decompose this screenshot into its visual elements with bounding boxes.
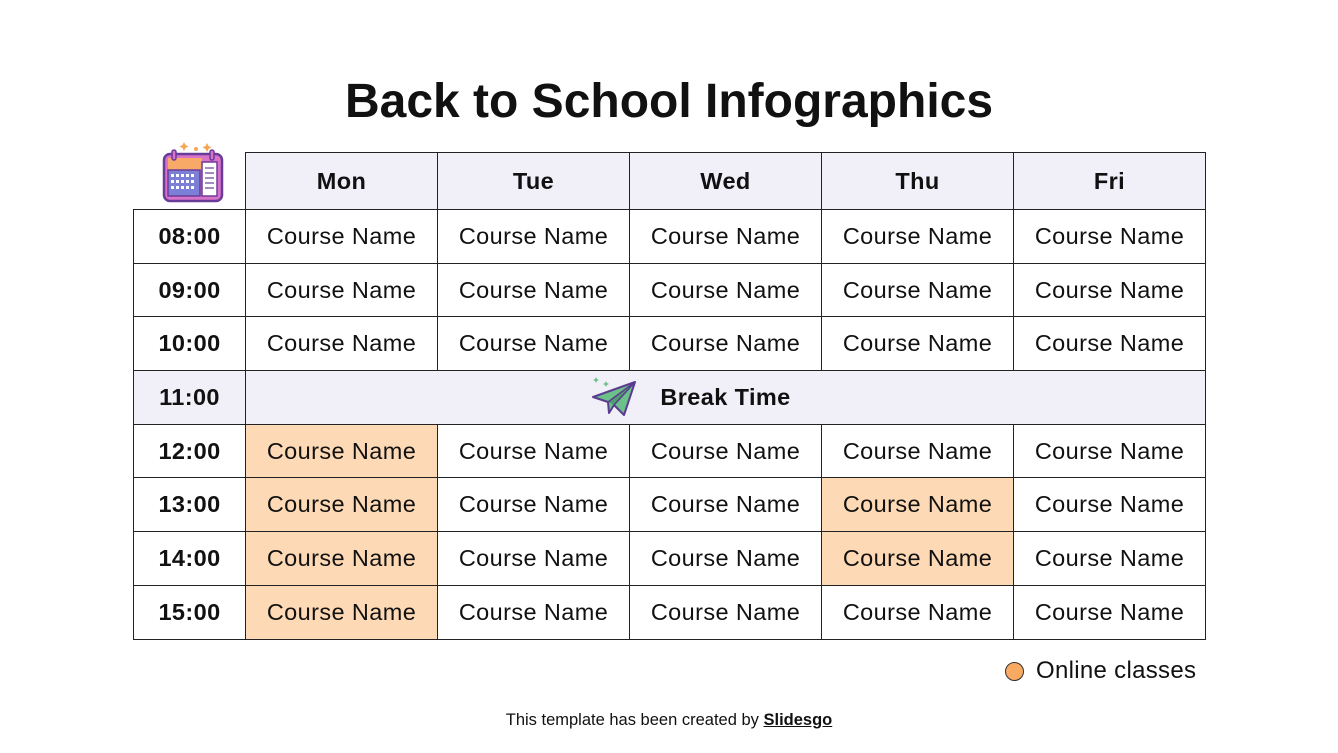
icon: calendar	[162, 142, 224, 202]
timetable: Course Name	[267, 277, 416, 303]
timetable: Course Name	[1035, 438, 1184, 464]
timetable: Course Name	[651, 223, 800, 249]
icon: paper plane	[592, 377, 636, 416]
timetable: Course Name	[843, 491, 992, 517]
timetable: Course Name	[843, 599, 992, 625]
legend: online classes: Online classes	[1036, 657, 1196, 684]
timetable: Course Name	[651, 438, 800, 464]
timetable: 15:00	[158, 599, 221, 625]
timetable: Mon	[317, 168, 366, 194]
timetable: Course Name	[459, 438, 608, 464]
timetable: Fri	[1094, 168, 1125, 194]
timetable: Course Name	[651, 330, 800, 356]
timetable: 09:00	[158, 277, 221, 303]
timetable: Course Name	[459, 277, 608, 303]
title: Back to School Infographics	[345, 75, 993, 128]
timetable: Thu	[895, 168, 940, 194]
timetable: Course Name	[1035, 545, 1184, 571]
timetable: Course Name	[651, 491, 800, 517]
timetable: Course Name	[267, 599, 416, 625]
timetable: Course Name	[267, 545, 416, 571]
timetable: Course Name	[1035, 223, 1184, 249]
timetable: 08:00	[158, 223, 221, 249]
timetable: 11:00	[159, 384, 220, 410]
timetable: Course Name	[843, 545, 992, 571]
timetable: Course Name	[459, 330, 608, 356]
timetable: Tue	[513, 168, 554, 194]
timetable	[133, 152, 1206, 640]
timetable: Course Name	[267, 330, 416, 356]
timetable: 13:00	[158, 491, 221, 517]
timetable: Wed	[700, 168, 751, 194]
timetable: Course Name	[1035, 330, 1184, 356]
timetable: Course Name	[1035, 599, 1184, 625]
timetable: Course Name	[843, 330, 992, 356]
timetable: Course Name	[459, 599, 608, 625]
timetable: Course Name	[651, 277, 800, 303]
timetable: Course Name	[651, 545, 800, 571]
timetable: 14:00	[158, 545, 221, 571]
timetable: Course Name	[267, 491, 416, 517]
timetable: Course Name	[459, 545, 608, 571]
timetable: Course Name	[267, 438, 416, 464]
footer credit: This template has been created by Slidesgo	[506, 711, 832, 729]
timetable: Course Name	[459, 491, 608, 517]
timetable: Course Name	[843, 438, 992, 464]
timetable: Course Name	[1035, 491, 1184, 517]
timetable: Course Name	[651, 599, 800, 625]
timetable: 12:00	[158, 438, 221, 464]
timetable: Course Name	[267, 223, 416, 249]
timetable: 10:00	[158, 330, 221, 356]
timetable: Course Name	[843, 277, 992, 303]
timetable: Break Time	[660, 384, 791, 410]
timetable: Course Name	[843, 223, 992, 249]
timetable: Course Name	[1035, 277, 1184, 303]
timetable: Course Name	[459, 223, 608, 249]
